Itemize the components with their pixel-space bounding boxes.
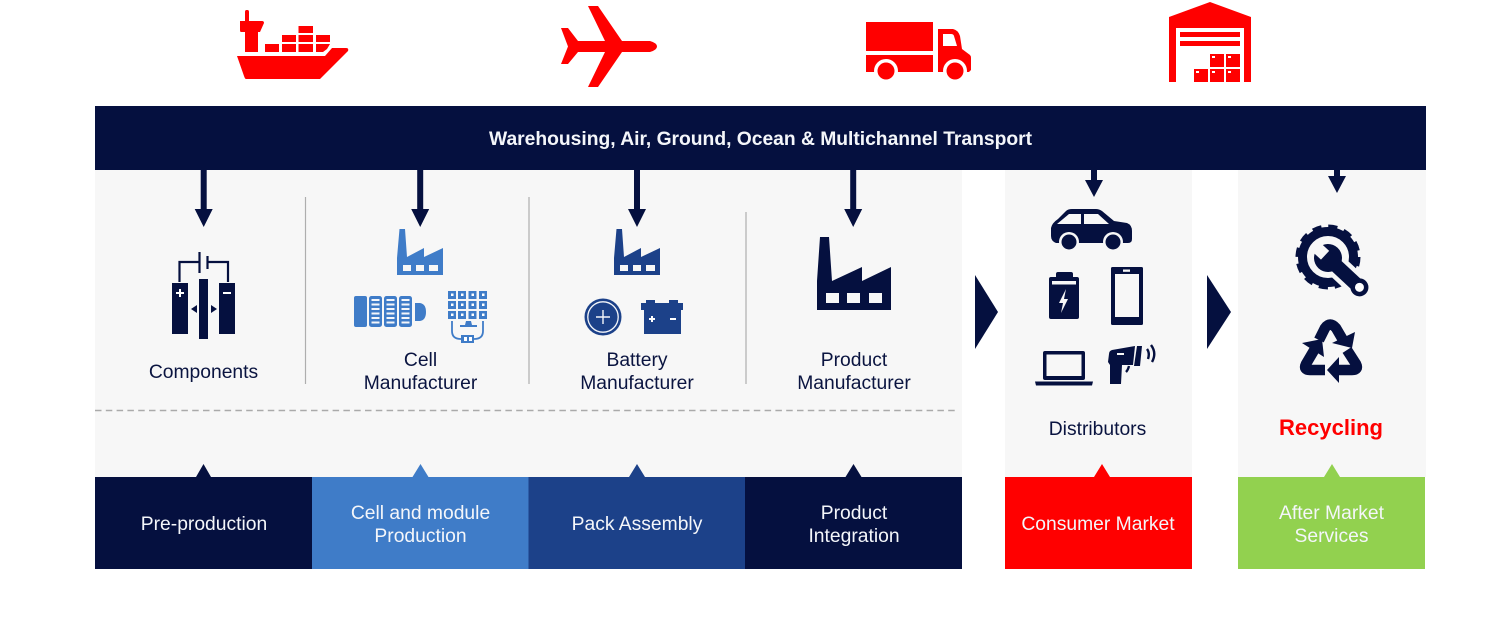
icon: warehouse xyxy=(1169,2,1251,82)
icon: cell grid with connector xyxy=(448,291,487,343)
panel: battery manufacturer xyxy=(580,229,694,394)
icon: smartphone xyxy=(1111,267,1143,325)
icon: battery with bolt xyxy=(1049,272,1079,319)
panel: recycling xyxy=(1279,227,1383,440)
label: distributors: Distributors xyxy=(1049,419,1146,440)
label: battery manufacturer: Manufacturer xyxy=(580,373,694,394)
arrow: transport to battery manufacturer xyxy=(628,170,646,227)
icon: cell module xyxy=(354,296,426,327)
icon: navy factory xyxy=(817,237,891,310)
label: cell manufacturer: Cell xyxy=(404,350,437,371)
label: components: Components xyxy=(149,362,258,383)
icon: gear and wrench xyxy=(1298,227,1376,304)
stage: product integration xyxy=(745,464,962,569)
icon: medium blue factory xyxy=(614,229,660,275)
icon: coin cell battery xyxy=(584,298,622,336)
stage: consumer market: Consumer Market xyxy=(1021,514,1175,535)
panel: cell manufacturer xyxy=(354,229,487,394)
label: product manufacturer: Manufacturer xyxy=(797,373,911,394)
icon: car battery xyxy=(641,300,683,334)
stage: after market services: Services xyxy=(1295,526,1368,547)
stage: after market services: After Market xyxy=(1279,503,1385,524)
stage: pack assembly xyxy=(528,464,745,569)
stage: after market services xyxy=(1238,464,1425,569)
stage: cell and module production: Cell and module xyxy=(351,503,490,524)
arrow: production to distributors xyxy=(975,275,998,349)
stage: pre-production xyxy=(95,464,312,569)
arrow: transport to cell manufacturer xyxy=(411,170,429,227)
icon: container ship xyxy=(237,10,348,79)
arrow: transport to distributors xyxy=(1085,170,1103,197)
icon: car xyxy=(1051,209,1132,252)
icon: recycling arrows xyxy=(1302,324,1357,383)
label: product manufacturer: Product xyxy=(821,350,888,371)
label: recycling: Recycling xyxy=(1279,415,1383,440)
label: cell manufacturer: Manufacturer xyxy=(364,373,478,394)
panel: distributors xyxy=(1035,209,1154,440)
label: battery manufacturer: Battery xyxy=(606,350,668,371)
icon: airplane xyxy=(561,6,657,87)
icon: truck xyxy=(866,22,971,83)
top transport bar: Warehousing, Air, Ground, Ocean & Multichannel Transport xyxy=(489,129,1033,150)
panel: components xyxy=(149,252,258,383)
icon: thermometer gun xyxy=(1108,345,1154,384)
panel: product manufacturer xyxy=(797,237,911,394)
icon: battery cell components xyxy=(172,252,235,339)
stage: pre-production: Pre-production xyxy=(141,514,267,535)
top transport bar xyxy=(95,106,1426,170)
arrow: transport to recycling xyxy=(1328,170,1346,193)
arrow: transport to product manufacturer xyxy=(844,170,862,227)
arrow: distributors to recycling xyxy=(1207,275,1231,349)
stage: product integration: Integration xyxy=(808,526,900,547)
stage: cell and module production: Production xyxy=(374,526,467,547)
icon: laptop xyxy=(1035,351,1093,386)
stage: cell and module production xyxy=(312,464,528,569)
stage: product integration: Product xyxy=(821,503,888,524)
arrow: transport to components xyxy=(195,170,213,227)
stage: pack assembly: Pack Assembly xyxy=(572,514,703,535)
icon: blue factory xyxy=(397,229,443,275)
background panels xyxy=(95,170,1426,477)
stage: consumer market xyxy=(1005,464,1192,569)
